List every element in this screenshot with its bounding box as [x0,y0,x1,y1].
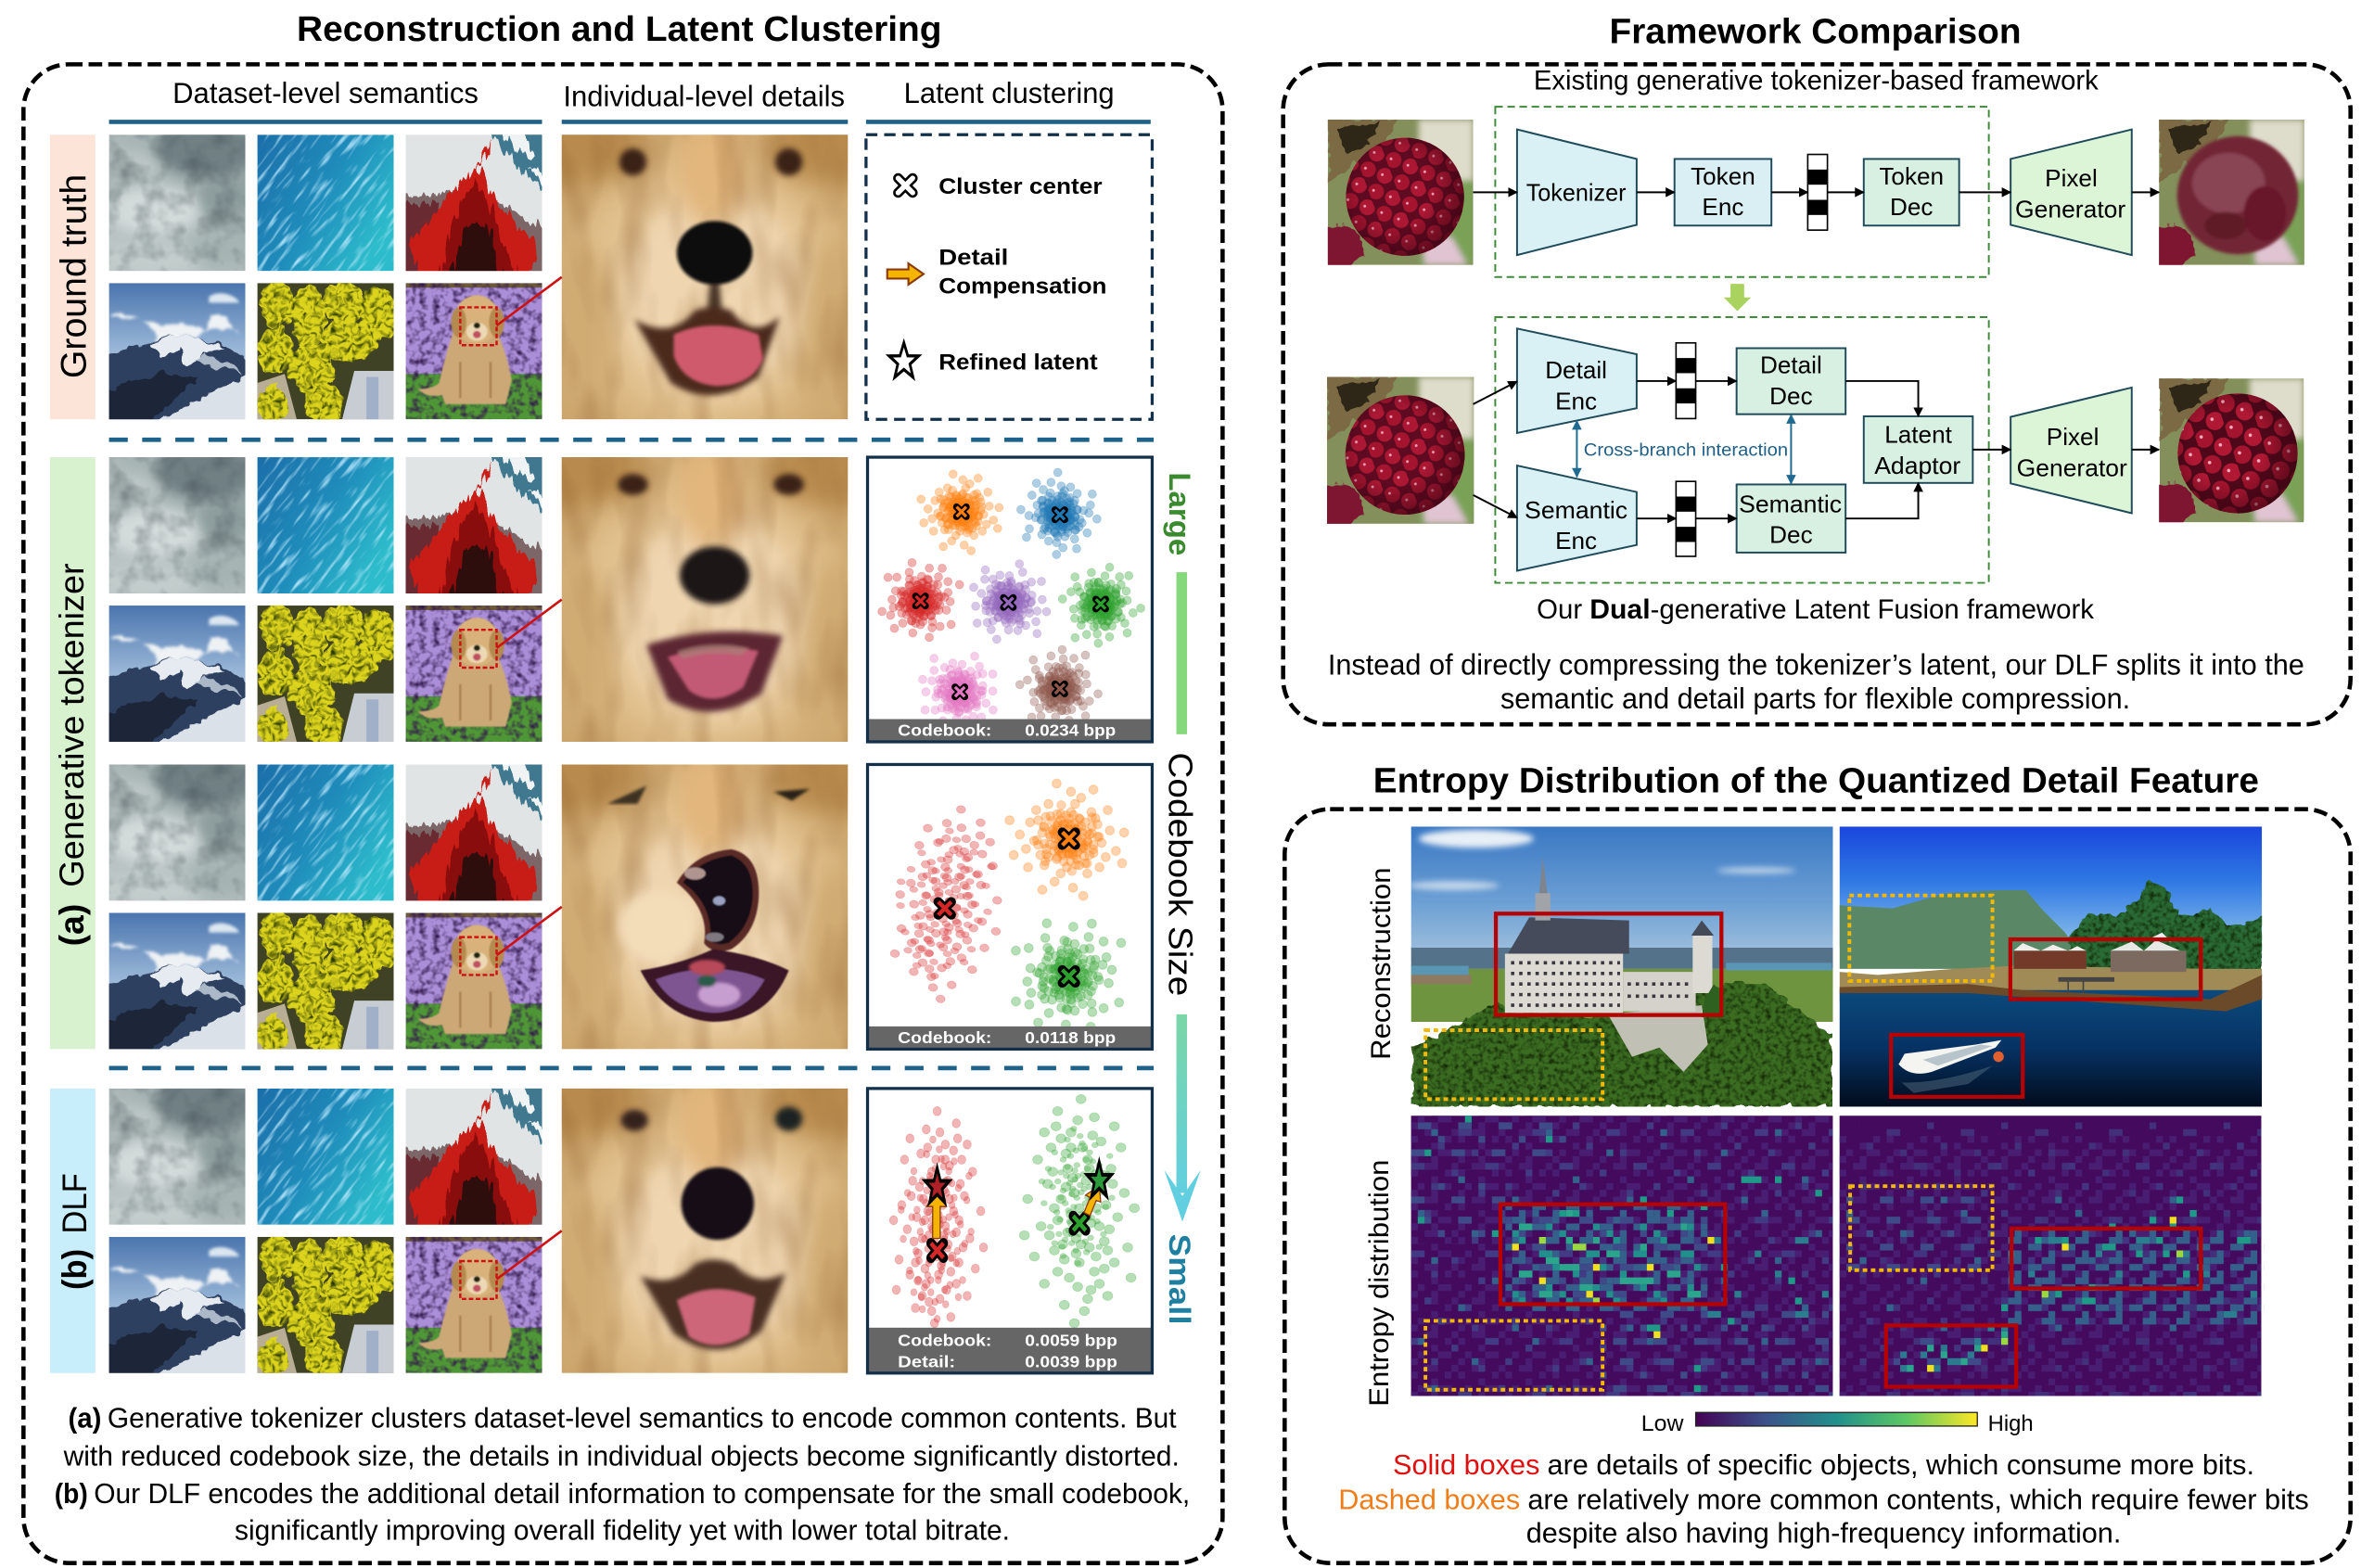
panel: reconstruction and latent clustering [23,22,1222,1563]
arrow: green cluster compensation [1084,1185,1101,1216]
pixel generator block: Generator [2017,453,2127,481]
caption: solid and dashed boxes explanation: Dashed boxes [1338,1485,1520,1516]
title: entropy distribution: Entropy Distribution of the Quantized Detail Feature [1373,761,2259,801]
scatter chart: dlf codebook and detail bpp: 0.0059 bpp [1025,1331,1117,1349]
scatter chart: dlf codebook and detail bpp: Detail: [898,1352,955,1370]
axis: codebook size large to small: Large [1163,472,1197,555]
detail dec block: Detail [1760,351,1822,378]
icon: cluster center [898,178,913,193]
caption: solid and dashed boxes explanation: are relatively more common contents, which require fewer bits [1527,1485,2309,1516]
colorbar legend: High [1988,1411,2034,1436]
row label: dlf: DLF [56,1173,94,1234]
semantic enc block [1517,465,1637,571]
pixel generator block: Pixel [2045,164,2098,192]
image: lake reconstruction [1840,826,2262,1106]
image: input raspberry [1316,377,1474,529]
latent adaptor block: Adaptor [1874,452,1961,479]
latent adaptor block: Latent [1884,421,1953,449]
scatter chart: codebook 0.0118 bpp [868,764,1155,1061]
scatter chart: codebook 0.0234 bpp [861,457,1155,751]
column header: latent clustering: Latent clustering [904,77,1115,109]
image: output raspberry refined [2150,378,2307,527]
semantic token bar [1676,481,1696,556]
token enc block: Token [1691,162,1755,190]
image: input raspberry [1317,120,1474,270]
semantic dec block: Semantic [1739,491,1842,518]
heading: dual-generative framework: Our [1537,594,1582,625]
heading: existing framework: Existing generative tokenizer-based framework [1534,65,2099,96]
pixel generator block: Generator [2015,195,2126,223]
heatmap: castle entropy [1411,1115,1832,1396]
icon: refined latent star [889,343,919,377]
arrow: red cluster compensation [926,1190,946,1238]
tokenizer block: Tokenizer [1526,178,1627,206]
token enc block: Enc [1702,193,1743,221]
row label: dlf [50,1089,96,1373]
pixel generator block [2010,130,2132,255]
column header: dataset-level semantics: Dataset-level semantics [172,77,479,109]
row label: generative tokenizer [50,457,96,1049]
semantic enc block: Semantic [1525,496,1627,524]
colorbar legend [1641,1411,2034,1436]
semantic enc block: Enc [1555,527,1597,555]
column header: individual-level details: Individual-level details [563,80,845,112]
text: cluster center: Cluster center [938,174,1103,199]
caption: framework description: Instead of directly compressing the tokenizer’s latent, our DLF splits it into the [1328,647,2304,681]
scatter chart: codebook 0.0118 bpp: 0.0118 bpp [1025,1028,1116,1047]
token enc block [1675,159,1771,225]
arrow: existing to dual framework [1724,284,1751,312]
text: detail compensation [938,246,1106,300]
detail enc block: Enc [1555,388,1597,415]
row label: ground truth [50,134,96,419]
image: output raspberry degraded [2149,120,2304,270]
caption: generative tokenizer and dlf explanation: (a) [68,1404,101,1434]
scatter chart: codebook 0.0118 bpp: Codebook: [898,1028,991,1047]
axis label: reconstruction: Reconstruction [1366,867,1397,1060]
token bar [1807,155,1828,230]
token dec block [1864,159,1959,225]
caption: solid and dashed boxes explanation: Solid boxes [1393,1450,1539,1481]
scatter chart: codebook 0.0234 bpp: Codebook: [898,720,991,739]
token dec block: Token [1879,162,1944,190]
diagram: existing framework [1317,107,2304,277]
row label: ground truth: Ground truth [54,174,94,378]
annotation boxes: lake reconstruction [1849,896,2201,1097]
caption: generative tokenizer and dlf explanation [55,1404,1190,1546]
caption: generative tokenizer and dlf explanation: Generative tokenizer clusters dataset-level semantics to encode common contents. But [108,1404,1177,1434]
semantic dec block: Dec [1769,520,1813,548]
title: framework comparison: Framework Comparison [1610,12,2022,52]
heading: dual-generative framework: Dual [1589,594,1651,625]
detail enc block: Detail [1545,356,1607,384]
caption: solid and dashed boxes explanation: are details of specific objects, which consume more bits. [1548,1450,2254,1481]
caption: solid and dashed boxes explanation: despite also having high-frequency information. [1526,1519,2121,1549]
pixel generator block: Pixel [2047,423,2099,451]
annotation boxes: castle reconstruction [1425,913,1721,1099]
caption: solid and dashed boxes explanation [1338,1450,2309,1549]
tokenizer block [1517,130,1637,255]
semantic dec block [1737,484,1845,553]
dog crop: large codebook [497,433,895,745]
detail enc block [1517,328,1637,433]
text: refined latent: Refined latent [938,350,1098,375]
scatter chart: dlf codebook and detail bpp: 0.0039 bpp [1025,1352,1117,1370]
scatter chart: dlf codebook and detail bpp: Codebook: [898,1331,991,1349]
heatmap: lake entropy [1840,1115,2264,1396]
row label: generative tokenizer: (a) [53,904,91,946]
axis label: entropy distribution: Entropy distribution [1364,1160,1395,1407]
image grid: dlf [100,976,550,1381]
heading: dual-generative framework: -generative Latent Fusion framework [1651,594,2094,625]
pixel generator block [2010,388,2132,513]
panel: framework comparison [1283,64,2351,724]
caption: generative tokenizer and dlf explanation: Our DLF encodes the additional detail information to compensate for the small codebook, [94,1479,1190,1510]
title: reconstruction and latent clustering: Reconstruction and Latent Clustering [297,9,942,49]
latent adaptor block [1864,416,1972,483]
detail dec block: Dec [1769,382,1813,410]
icon: detail compensation arrow [887,263,924,285]
axis: codebook size large to small: Codebook Size [1161,752,1199,996]
label: cross-branch interaction: Cross-branch interaction [1584,440,1788,460]
annotation boxes: castle entropy [1425,1205,1725,1390]
axis: codebook size large to small: Small [1163,1234,1197,1325]
text: detail compensation: Detail [938,246,1008,271]
annotation boxes: lake entropy [1850,1186,2201,1386]
row label: generative tokenizer: Generative tokenizer [53,563,91,887]
flow arrows [1474,381,2159,518]
image grid: generative tokenizer small codebook [100,652,550,1057]
dog crop: small codebook distorted [497,740,895,1052]
token dec block: Dec [1890,193,1933,221]
axis: codebook size large to small [1161,472,1201,1325]
scatter chart: dlf codebook and detail bpp [868,1089,1152,1373]
dog crop: dlf [497,1064,895,1376]
text: detail compensation: Compensation [938,274,1106,300]
row label: dlf: (b) [56,1249,94,1290]
legend: latent clustering [866,134,1152,419]
diagram: dual-generative latent fusion [1316,317,2307,583]
caption: framework description: semantic and detail parts for flexible compression. [1500,682,2130,715]
caption: framework description [1328,647,2304,715]
caption: generative tokenizer and dlf explanation: with reduced codebook size, the details in individual objects become significantly distorted. [63,1441,1180,1472]
detail dec block [1737,349,1845,414]
flow arrows [1474,191,2159,193]
image grid: generative tokenizer large codebook [100,345,550,749]
caption: generative tokenizer and dlf explanation: (b) [55,1479,88,1510]
colorbar legend: Low [1641,1411,1684,1436]
detail token bar [1676,343,1696,418]
image: castle reconstruction [1408,826,1833,1106]
image grid: ground truth [100,22,550,427]
panel: entropy distribution [1284,809,2351,1563]
dog crop: ground truth [497,110,895,423]
cross-branch interaction arrows [1576,414,1791,484]
scatter chart: codebook 0.0234 bpp: 0.0234 bpp [1025,720,1116,739]
caption: generative tokenizer and dlf explanation: significantly improving overall fidelity yet with lower total bitrate. [235,1515,1010,1546]
